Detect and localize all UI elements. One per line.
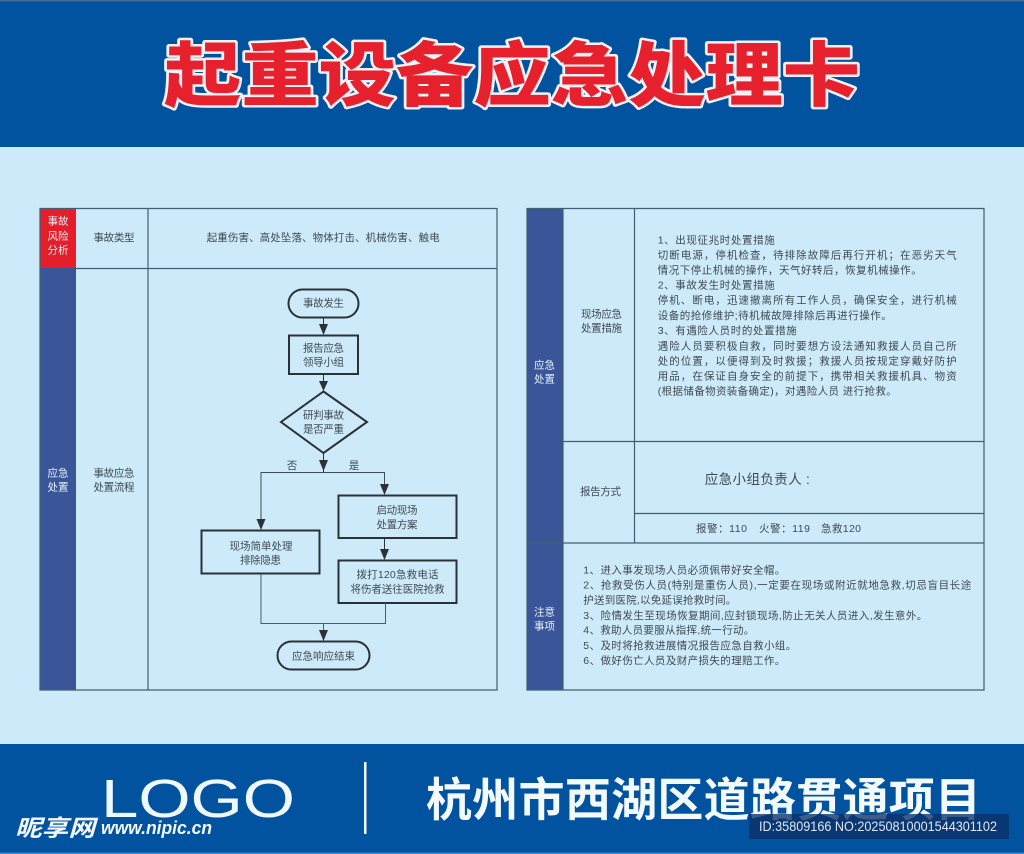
- onsite measures text: 2、事故发生时处置措施: [658, 278, 775, 292]
- row label: response flow: 处置流程: [94, 480, 135, 494]
- notes text: 4、救助人员要服从指挥,统一行动。: [583, 624, 754, 636]
- panel: right table: [527, 208, 984, 690]
- row label: response flow: [94, 466, 135, 494]
- notes text: 护送到医院,以免延误抢救时间。: [583, 594, 736, 606]
- watermark: www.nipic.cn: [101, 818, 212, 838]
- blue section cell: 应急: [534, 358, 555, 372]
- branch connector lines: [261, 472, 384, 520]
- arrow: decision to branch: [319, 453, 328, 472]
- onsite measures text: 停机、断电，迅速撤离所有工作人员，确保安全，进行机械: [658, 294, 957, 306]
- red section cell: 风险: [48, 230, 69, 242]
- start node: [288, 290, 358, 318]
- merge connector lines: [261, 574, 386, 632]
- row label: onsite measures: 处置措施: [581, 322, 622, 334]
- accident types list: 起重伤害、高处坠落、物体打击、机械伤害、触电: [207, 231, 440, 244]
- notes text: 6、做好伤亡人员及财产损失的理赔工作。: [583, 654, 785, 667]
- start plan box: 处置方案: [376, 518, 418, 531]
- end node: [278, 642, 370, 670]
- logo text: LOGO: [101, 769, 295, 829]
- decision diamond: 研判事故: [303, 408, 344, 422]
- onsite measures text: 3、有遇险人员时的处置措施: [658, 324, 797, 337]
- simple handling box: 排除隐患: [240, 554, 281, 566]
- phone numbers: 火警：119: [759, 522, 810, 535]
- onsite measures text: 处的位置，以便得到及时救援；救援人员按规定穿戴好防护: [658, 354, 957, 368]
- image id box: ID:35809166 NO:20250810001544301102: [759, 818, 997, 834]
- blue section cell: 注意: [534, 606, 555, 618]
- watermark: 昵享网: [15, 809, 98, 843]
- onsite measures text: (根据储备物资装备确定)，对遇险人员 进行抢救。: [658, 384, 897, 398]
- call 120 box: 拨打120急救电话: [356, 568, 439, 581]
- phone numbers: 报警：110: [696, 522, 747, 535]
- row label: accident type: 事故类型: [94, 231, 134, 244]
- phone numbers: [696, 522, 861, 535]
- onsite measures text: 情况下停止机械的操作，天气好转后，恢复机械操作。: [658, 264, 922, 276]
- onsite measures text: 设备的抢修维护;待机械故障排除后再进行操作。: [658, 309, 892, 322]
- footer band: [0, 744, 1024, 854]
- arrow: merge to end: [319, 630, 328, 641]
- header band: [0, 0, 1024, 147]
- panel: left table: [40, 208, 497, 690]
- call 120 box: 将伤者送往医院抢救: [350, 582, 445, 596]
- title: 起重设备应急处理卡: [164, 20, 860, 121]
- branch label no: 否: [287, 460, 298, 472]
- report box: 报告应急: [303, 342, 344, 354]
- end node: 应急响应结束: [292, 650, 356, 662]
- start node: 事故发生: [303, 296, 344, 310]
- emergency lead: :: [806, 472, 810, 487]
- table grid: [527, 208, 984, 690]
- decision diamond: [281, 392, 367, 453]
- project name: 杭州市西湖区道路贯通项目: [426, 764, 981, 830]
- report box: [289, 336, 358, 374]
- phone numbers: 急救120: [821, 522, 861, 535]
- onsite measures text: 用品，在保证自身安全的前提下，携带相关救援机具、物资: [658, 370, 957, 382]
- emergency lead: 应急小组负责人: [705, 471, 802, 487]
- row label: onsite measures: [581, 308, 622, 334]
- arrow: into simple handling: [256, 519, 266, 530]
- blue section cell: 事项: [534, 620, 555, 632]
- vertical divider: [364, 762, 366, 834]
- row label: response flow: 事故应急: [94, 466, 134, 480]
- image id box: [749, 814, 1009, 839]
- notes text: 1、进入事发现场人员必须佩带好安全帽。: [583, 564, 785, 576]
- onsite measures text: 切断电源，停机检查，待排除故障后再行开机；在恶劣天气: [658, 248, 957, 262]
- red section cell: [40, 208, 76, 268]
- flowchart: [202, 290, 456, 670]
- table grid: [40, 208, 497, 690]
- branch label yes: 是: [349, 460, 360, 472]
- red section cell: 事故: [48, 214, 69, 228]
- blue section cell: 应急: [48, 466, 68, 480]
- watermark: [15, 809, 212, 843]
- simple handling box: [202, 530, 320, 574]
- decision diamond: 是否严重: [303, 422, 344, 436]
- row label: report method: 报告方式: [580, 485, 622, 498]
- onsite measures text: 1、出现征兆时处置措施: [658, 234, 775, 246]
- blue section cell: [40, 268, 76, 690]
- row label: onsite measures: 现场应急: [581, 308, 622, 320]
- call 120 box: [338, 560, 456, 603]
- simple handling box: 现场简单处理: [230, 540, 293, 552]
- arrow: into start plan: [380, 484, 389, 495]
- notes text: 2、抢救受伤人员(特别是重伤人员),一定要在现场或附近就地急救,切忌盲目长途: [583, 578, 972, 592]
- arrow: start to report: [319, 318, 328, 335]
- onsite measures text: 遇险人员要积极自救，同时要想方设法通知救援人员自己所: [658, 340, 957, 352]
- blue section cell: [527, 208, 563, 690]
- red section cell: 分析: [48, 244, 69, 256]
- report box: 领导小组: [303, 356, 344, 368]
- blue section cell: 处置: [48, 482, 68, 494]
- notes text: [583, 564, 972, 667]
- start plan box: [338, 496, 456, 538]
- blue section cell: 处置: [534, 374, 555, 386]
- arrow: report to decision: [319, 374, 328, 391]
- notes text: 3、险情发生至现场恢复期间,应封锁现场,防止无关人员进入,发生意外。: [583, 609, 927, 622]
- onsite measures text: [658, 234, 957, 398]
- start plan box: 启动现场: [376, 504, 418, 516]
- notes text: 5、及时将抢救进展情况报告应急自救小组。: [583, 639, 796, 652]
- arrow: plan to call: [380, 538, 389, 560]
